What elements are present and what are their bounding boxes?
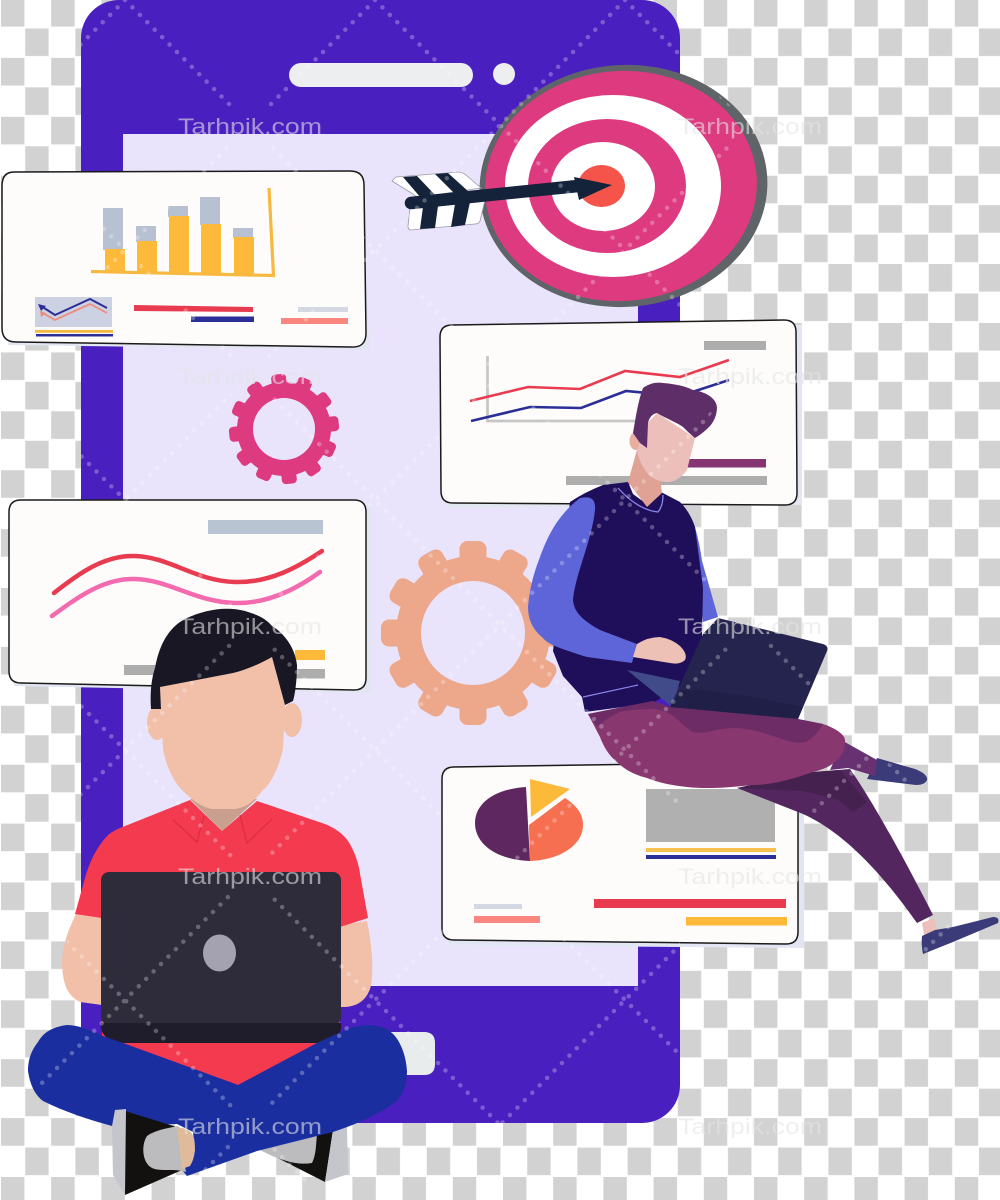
phone speaker (289, 63, 473, 87)
panel: line chart card (440, 320, 802, 508)
thigh shadow (588, 701, 823, 743)
legend bars (474, 899, 787, 926)
hair (151, 609, 297, 709)
neck (628, 450, 662, 507)
sock and ankle (143, 1126, 195, 1172)
chart labels (566, 341, 767, 485)
shirt collar (173, 815, 272, 843)
grey block and lines (646, 789, 776, 859)
pie chart (475, 779, 583, 861)
panel: wave chart card (9, 500, 372, 693)
bar chart (91, 188, 274, 276)
mini line chart (35, 297, 113, 336)
right foot (256, 1126, 348, 1182)
near foot (867, 758, 927, 785)
right arm (338, 921, 372, 1007)
ear (630, 432, 642, 450)
watermark text: Tarhpik.com (678, 864, 822, 889)
far leg (737, 769, 998, 954)
left foot (112, 1109, 192, 1195)
icon: orange gear (381, 541, 565, 725)
jeans (28, 1025, 407, 1176)
line chart (470, 356, 729, 421)
hair (633, 383, 717, 448)
arrow shaft (411, 186, 578, 203)
far foot (922, 917, 998, 954)
phone body (81, 0, 680, 1123)
laptop (101, 872, 341, 1043)
shirt (75, 800, 368, 1085)
near calf (830, 741, 877, 776)
watermark text: Tarhpik.com (678, 114, 822, 139)
chart labels (124, 520, 325, 678)
watermark text: Tarhpik.com (178, 864, 322, 889)
watermark text: Tarhpik.com (178, 1114, 322, 1139)
vest collar (618, 488, 663, 512)
figure: man on laptop sitting on card (528, 383, 998, 954)
neck (190, 799, 257, 831)
thigh (588, 701, 845, 788)
open laptop (627, 618, 828, 719)
panel: bar chart card (2, 171, 370, 350)
right sleeve (695, 527, 718, 622)
hand (633, 637, 686, 664)
arrow (392, 172, 612, 230)
arrow fletching (392, 172, 485, 230)
watermark text: Tarhpik.com (678, 614, 822, 639)
face (637, 413, 695, 482)
figure: man sitting cross-legged (28, 609, 407, 1195)
vest (553, 482, 703, 712)
phone camera (493, 63, 515, 85)
panel: pie chart card (442, 762, 804, 948)
target (471, 55, 776, 317)
left sleeve (528, 497, 637, 663)
phone screen (123, 134, 638, 986)
watermark text: Tarhpik.com (678, 1114, 822, 1139)
watermark text: Tarhpik.com (178, 614, 322, 639)
face (160, 657, 285, 809)
watermark text: Tarhpik.com (178, 114, 322, 139)
icon: pink gear (224, 369, 344, 489)
legend bars (134, 305, 348, 324)
arrow head (574, 177, 612, 200)
left arm (62, 914, 102, 1005)
watermark text: Tarhpik.com (178, 364, 322, 389)
wave lines (52, 551, 322, 616)
watermark text (178, 114, 822, 1139)
laptop logo (203, 934, 236, 972)
watermark text: Tarhpik.com (678, 364, 822, 389)
phone home button (380, 1032, 435, 1075)
vest hem (583, 685, 638, 697)
ears (147, 703, 302, 740)
